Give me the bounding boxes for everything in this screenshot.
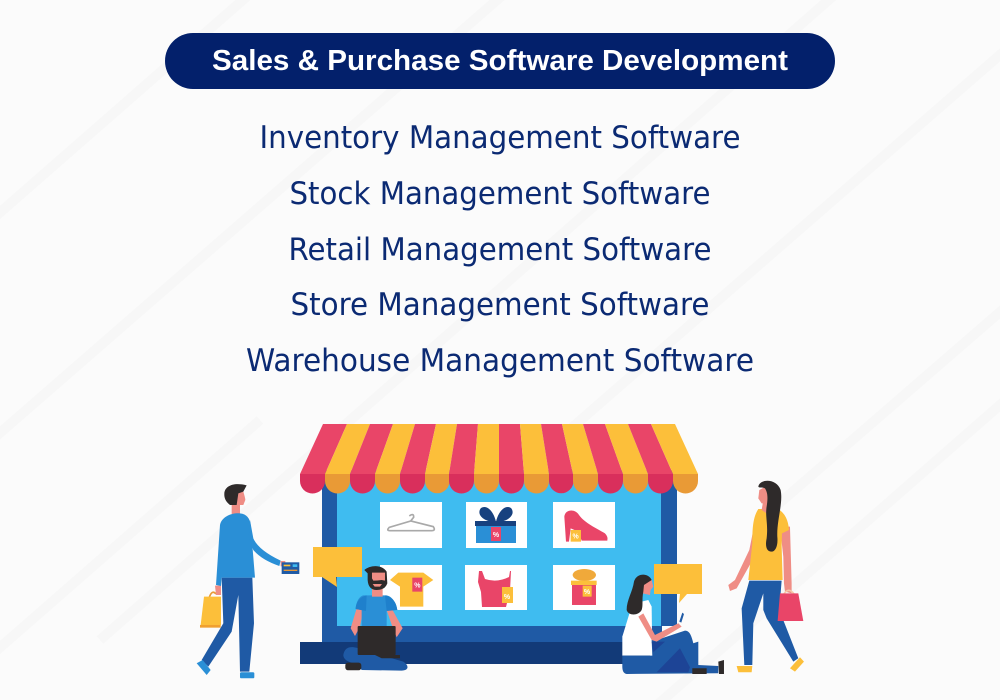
store lower bar bbox=[322, 626, 662, 643]
speech bubble: left bbox=[313, 547, 362, 587]
man bag bbox=[200, 592, 221, 628]
shelf: t-shirt: % bbox=[414, 582, 421, 589]
person: seated woman with phone bbox=[622, 575, 724, 674]
shelf: t-shirt bbox=[380, 565, 442, 610]
person: standing woman with bag bbox=[728, 481, 804, 672]
shelf: hanger bbox=[380, 502, 442, 548]
woman bag bbox=[778, 590, 803, 621]
storefront illustration bbox=[300, 424, 698, 664]
list item: stock: Stock Management Software bbox=[290, 176, 710, 212]
store window wall bbox=[337, 470, 661, 626]
store base bbox=[300, 642, 650, 664]
list item: inventory: Inventory Management Software bbox=[260, 120, 740, 156]
shelf: shoe bbox=[553, 502, 615, 548]
shelf: gift box bbox=[466, 502, 527, 548]
shelf: top: % bbox=[504, 594, 511, 601]
shelf: gift bag: % bbox=[584, 589, 591, 596]
laptop bbox=[358, 626, 400, 658]
store frame bbox=[322, 470, 677, 626]
title pill: Sales & Purchase Software Development bbox=[212, 45, 788, 77]
person: man with card bbox=[197, 484, 299, 678]
person: seated man with laptop bbox=[343, 566, 407, 671]
title pill bbox=[165, 33, 835, 89]
shelf: shoe: % bbox=[573, 534, 580, 541]
awning bbox=[300, 424, 698, 494]
credit card bbox=[281, 561, 299, 574]
shelf: gift bag bbox=[553, 565, 615, 610]
awning scallops bbox=[300, 474, 698, 494]
software list bbox=[246, 120, 754, 379]
shelf: top bbox=[465, 565, 527, 610]
list item: store: Store Management Software bbox=[290, 287, 710, 323]
shelf: gift box: % bbox=[493, 532, 500, 539]
speech bubble: right bbox=[654, 564, 702, 603]
list item: retail: Retail Management Software bbox=[288, 232, 712, 268]
list item: warehouse: Warehouse Management Software bbox=[246, 343, 754, 379]
